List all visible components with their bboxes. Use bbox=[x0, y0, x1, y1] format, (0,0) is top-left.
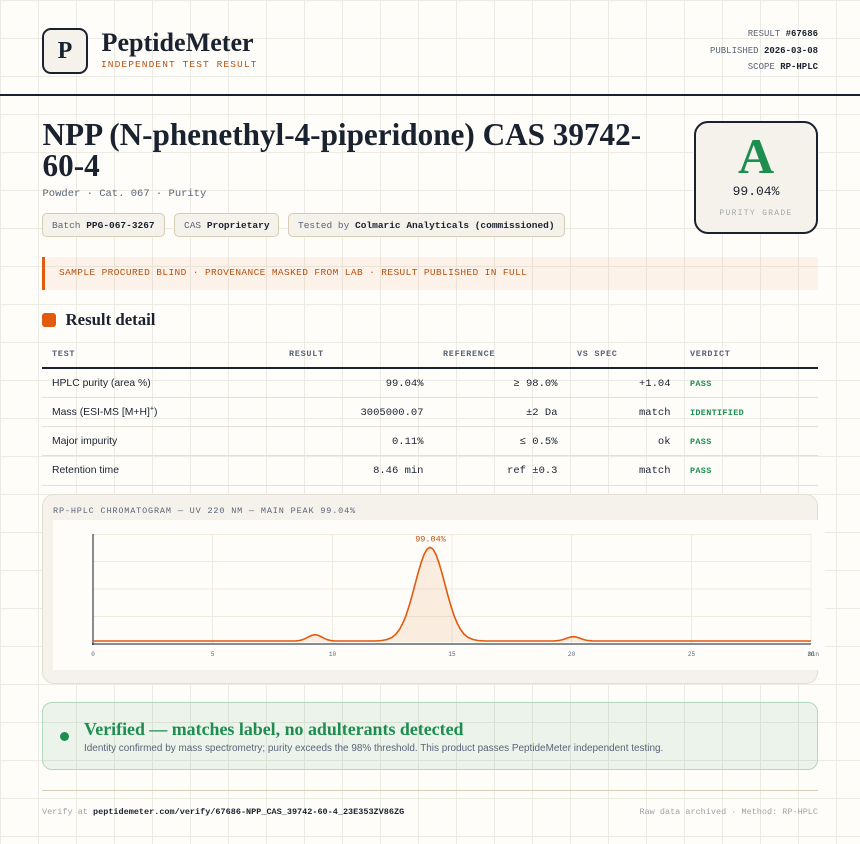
logo mark bbox=[42, 28, 88, 74]
area under trace bbox=[93, 547, 811, 642]
x axis tick labels: 30 bbox=[807, 651, 815, 658]
purity value: 99.04% bbox=[733, 184, 779, 199]
header divider bbox=[0, 94, 860, 96]
chip: CAS bbox=[174, 213, 279, 237]
icon: verified dot bbox=[60, 732, 69, 741]
chip: tested by: Tested by Colmaric Analyticals (commissioned) bbox=[298, 220, 555, 231]
product title: 60-4 bbox=[42, 148, 100, 183]
grade caption: PURITY GRADE bbox=[719, 209, 793, 218]
verification link: Verify at peptidemeter.com/verify/67686-NPP_CAS_39742-60-4_23E353ZV86ZG bbox=[42, 807, 404, 817]
row: retention time: match bbox=[639, 465, 670, 477]
blind sample notice bbox=[42, 257, 818, 290]
product subtitle: Powder · Cat. 067 · Purity bbox=[42, 188, 206, 200]
verified description: Identity confirmed by mass spectrometry; purity exceeds the 98% threshold. This product passes PeptideMeter independent testing. bbox=[84, 743, 663, 754]
row: HPLC purity: 99.04% bbox=[386, 378, 424, 390]
section title: Result detail bbox=[66, 310, 155, 329]
row: mass: 3005000.07 bbox=[360, 407, 424, 419]
row: HPLC purity: PASS bbox=[690, 379, 712, 389]
row: mass: ±2 Da bbox=[526, 407, 558, 419]
x axis tick labels: min bbox=[808, 651, 819, 658]
x axis tick labels: 10 bbox=[329, 651, 336, 658]
axes bbox=[92, 534, 811, 645]
x axis tick labels: 20 bbox=[568, 651, 575, 658]
brand tagline: INDEPENDENT TEST RESULT bbox=[101, 59, 257, 70]
table header: TEST bbox=[52, 349, 75, 359]
x axis tick labels bbox=[91, 651, 819, 658]
row: retention time: ref ±0.3 bbox=[507, 465, 558, 477]
chip: batch: Batch PPG-067-3267 bbox=[52, 220, 155, 231]
footer divider bbox=[42, 790, 818, 791]
row: retention time: 8.46 min bbox=[373, 465, 424, 477]
x axis tick labels: 0 bbox=[91, 651, 95, 658]
table header: RESULT bbox=[289, 349, 324, 359]
row: HPLC purity: HPLC purity (area %) bbox=[52, 378, 151, 389]
grade letter: A bbox=[738, 128, 774, 184]
chromatogram caption: RP-HPLC CHROMATOGRAM — UV 220 NM — MAIN PEAK 99.04% bbox=[53, 506, 356, 516]
row: mass: match bbox=[639, 407, 670, 419]
table header bbox=[42, 349, 818, 369]
result metadata: SCOPE RP-HPLC bbox=[748, 62, 818, 72]
result metadata: RESULT #67686 bbox=[748, 29, 818, 39]
footer method note: Raw data archived · Method: RP-HPLC bbox=[639, 807, 818, 817]
brand name: PeptideMeter bbox=[102, 28, 254, 57]
row: retention time bbox=[42, 465, 818, 486]
table header: VS SPEC bbox=[577, 349, 618, 359]
chip: CAS: CAS Proprietary bbox=[184, 220, 270, 231]
result metadata bbox=[710, 29, 818, 72]
row: retention time: Retention time bbox=[52, 465, 119, 476]
chip: tested by bbox=[288, 213, 565, 237]
row: retention time: PASS bbox=[690, 466, 712, 476]
row: major impurity: Major impurity bbox=[52, 436, 117, 447]
blind sample notice: SAMPLE PROCURED BLIND · PROVENANCE MASKED FROM LAB · RESULT PUBLISHED IN FULL bbox=[59, 267, 527, 278]
logo mark: P bbox=[58, 38, 72, 64]
row: HPLC purity: +1.04 bbox=[639, 378, 670, 390]
product title bbox=[42, 117, 641, 183]
row: mass: Mass (ESI-MS [M+H]+) bbox=[52, 406, 157, 418]
x axis tick labels: 25 bbox=[688, 651, 695, 658]
verified callout bbox=[42, 702, 818, 770]
HPLC trace bbox=[93, 547, 811, 641]
product title: NPP (N-phenethyl-4-piperidone) CAS 39742- bbox=[42, 117, 641, 152]
panel: chromatogram bbox=[42, 494, 818, 684]
x axis tick labels: 5 bbox=[211, 651, 215, 658]
row: HPLC purity bbox=[42, 378, 818, 398]
grade badge bbox=[694, 121, 818, 234]
row: HPLC purity: ≥ 98.0% bbox=[513, 378, 558, 390]
row: major impurity: ok bbox=[658, 436, 670, 448]
row: major impurity: 0.11% bbox=[392, 436, 424, 448]
row: major impurity bbox=[42, 436, 818, 456]
row: major impurity: PASS bbox=[690, 437, 712, 447]
table header: REFERENCE bbox=[443, 349, 495, 359]
result metadata: PUBLISHED 2026-03-08 bbox=[710, 46, 818, 56]
row: mass: IDENTIFIED bbox=[690, 408, 744, 418]
results table bbox=[42, 349, 818, 486]
section heading: result detail bbox=[42, 310, 156, 329]
section marker bbox=[42, 313, 56, 327]
chromatogram chart bbox=[53, 520, 825, 670]
verified heading: Verified — matches label, no adulterants detected bbox=[84, 719, 463, 739]
table header: VERDICT bbox=[690, 349, 731, 359]
row: major impurity: ≤ 0.5% bbox=[520, 436, 558, 448]
peak label: 99.04% bbox=[415, 534, 447, 544]
x axis tick labels: 15 bbox=[448, 651, 456, 658]
chip: batch bbox=[42, 213, 165, 237]
row: mass bbox=[42, 406, 818, 427]
